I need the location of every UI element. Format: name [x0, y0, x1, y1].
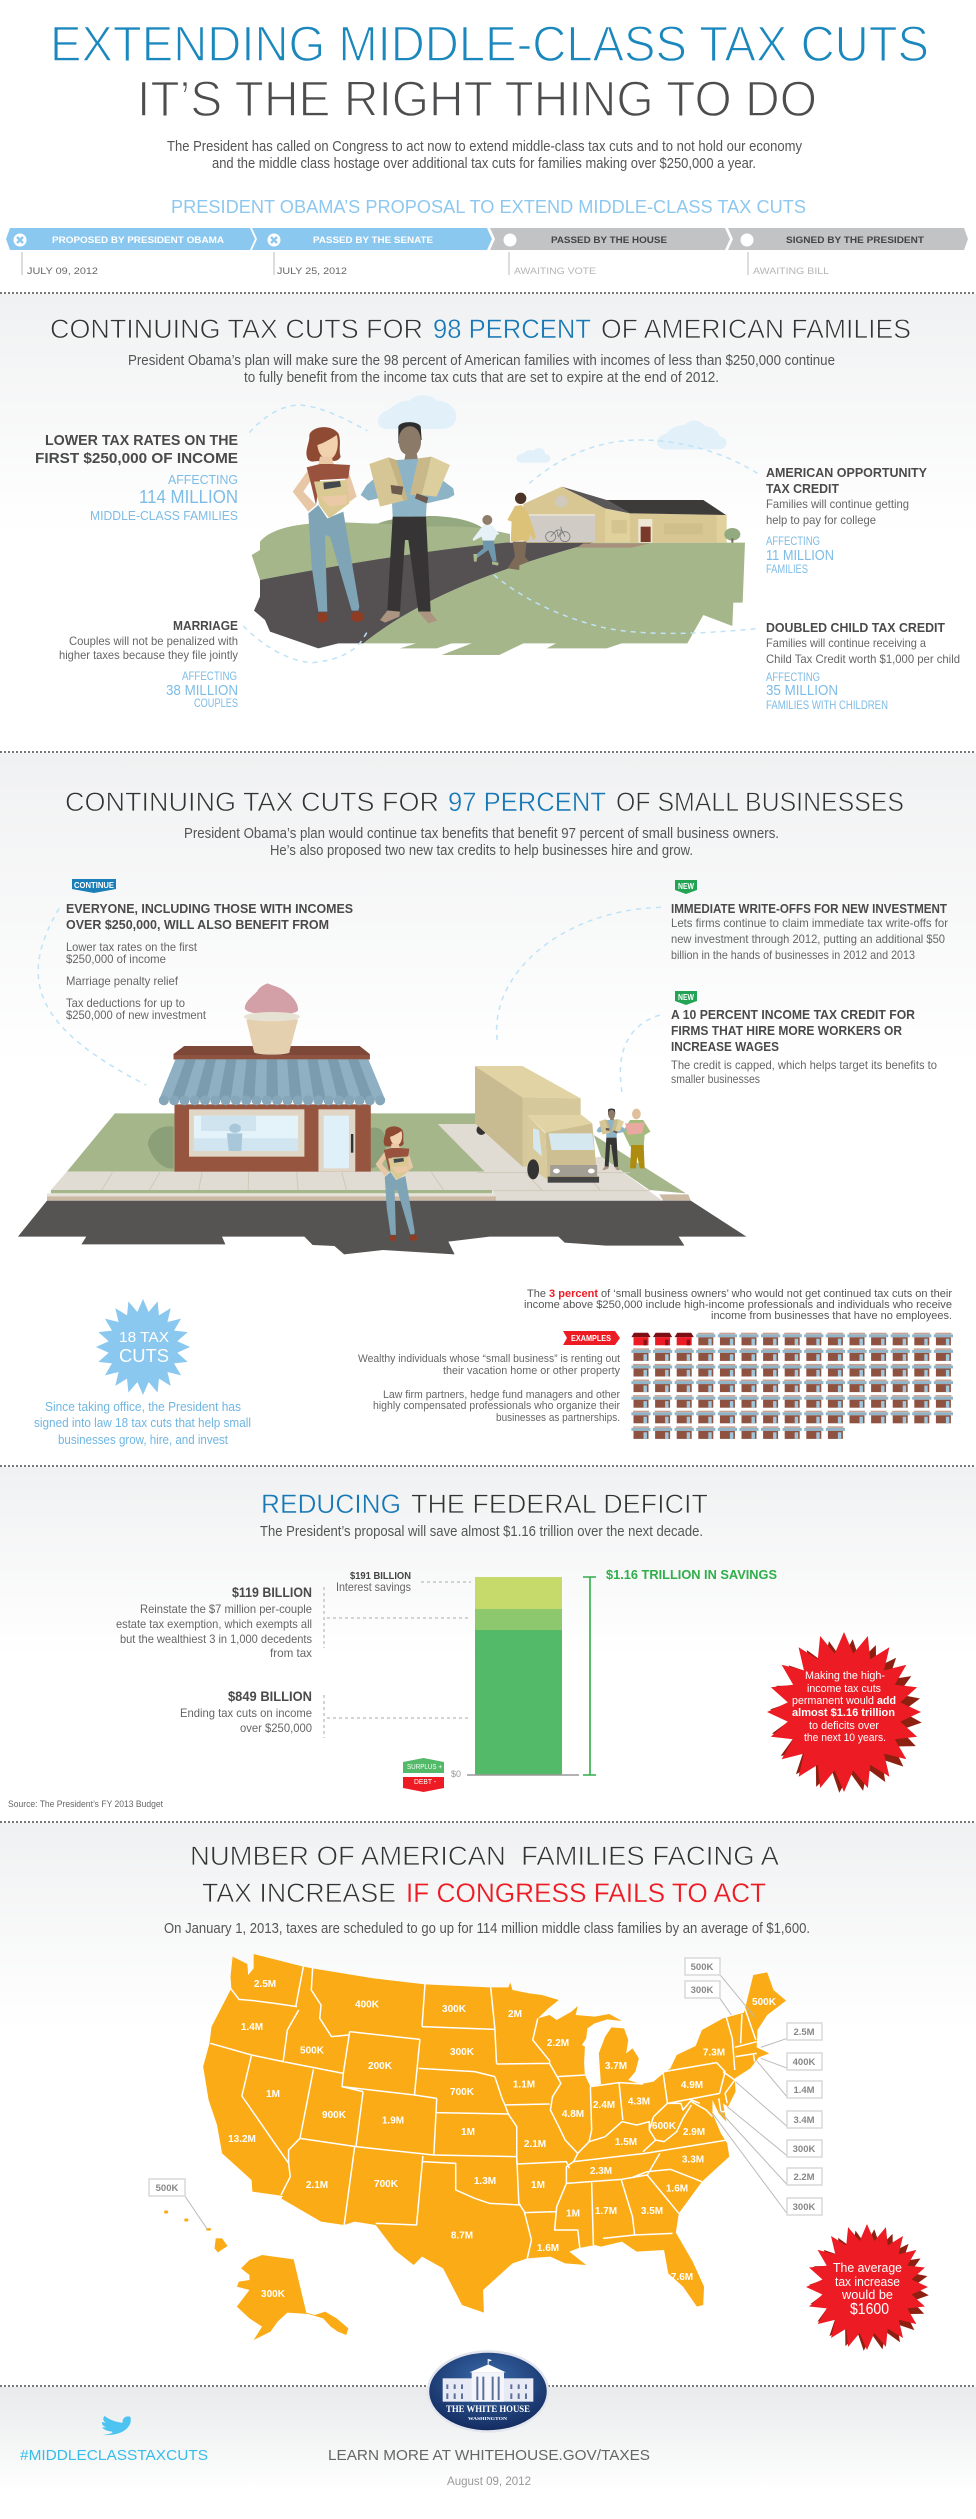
- state value labels: 700K: [450, 2087, 475, 2098]
- callout boxes: 3.4M: [793, 2115, 815, 2126]
- heading: IF CONGRESS FAILS TO ACT: [406, 1878, 766, 1908]
- callout: continue: Lower tax rates on the first: [66, 940, 198, 954]
- callout: lower tax rates: 114 MILLION: [139, 487, 238, 507]
- callout: lower tax rates: [35, 432, 238, 523]
- state value labels: 3.7M: [605, 2061, 627, 2072]
- state value labels: 500K: [300, 2046, 325, 2056]
- step: signed by president: SIGNED BY THE PRESIDENT: [786, 235, 924, 246]
- learn more: LEARN MORE AT WHITEHOUSE.GOV/TAXES: [328, 2448, 650, 2464]
- label: 849 billion: $849 BILLION: [228, 1689, 312, 1704]
- examples text: Law firm partners, hedge fund managers and other: [383, 1389, 620, 1401]
- store building: [159, 1046, 385, 1172]
- callout: marriage: Couples will not be penalized with: [69, 634, 238, 648]
- callout: doubled child tax credit: 35 MILLION: [766, 682, 838, 699]
- section intro: On January 1, 2013, taxes are scheduled to go up for 114 million middle class families by an average of $1,600.: [164, 1920, 810, 1937]
- state value labels: 2.3M: [590, 2166, 612, 2177]
- badge: continue: [72, 879, 116, 893]
- callout: marriage: COUPLES: [194, 696, 238, 710]
- alaska: [237, 2255, 348, 2340]
- state value labels: 2.1M: [524, 2139, 546, 2150]
- hashtag: #MIDDLECLASSTAXCUTS: [20, 2448, 208, 2464]
- surplus and debt key: [403, 1758, 444, 1792]
- callout: american opportunity tax credit: TAX CREDIT: [766, 481, 839, 496]
- callout: continue: $250,000 of income: [66, 952, 166, 966]
- heading: TAX INCREASE: [202, 1878, 396, 1908]
- examples tag: EXAMPLES: [571, 1333, 611, 1343]
- callout boxes: 1.4M: [793, 2085, 815, 2096]
- state value labels: 4.3M: [628, 2096, 650, 2108]
- callout: 10 percent credit: The credit is capped, which helps target its benefits to: [671, 1058, 937, 1072]
- label: 119 billion: Reinstate the $7 million per-couple: [140, 1602, 312, 1616]
- road: [18, 1201, 746, 1254]
- white house seal: [428, 2352, 548, 2432]
- callout: 10 percent credit: A 10 PERCENT INCOME TAX CREDIT FOR: [671, 1007, 916, 1022]
- starburst: 18 tax cuts: [96, 1299, 190, 1395]
- examples tag: [563, 1331, 620, 1345]
- callout: lower tax rates: FIRST $250,000 OF INCOME: [35, 450, 238, 467]
- starburst: average increase: $1600: [850, 2301, 889, 2318]
- callout: american opportunity tax credit: FAMILIES: [766, 562, 808, 576]
- starburst: deficit warning: Making the high-: [805, 1670, 885, 1682]
- heading: 98 PERCENT: [433, 314, 591, 344]
- heading: [261, 1489, 708, 1519]
- callout: immediate write-offs: Lets firms continue to claim immediate tax write-offs for: [671, 916, 948, 930]
- state value labels: 2.2M: [547, 2038, 569, 2049]
- state borders: [210, 1967, 757, 2258]
- title: EXTENDING MIDDLE-CLASS TAX CUTS: [50, 16, 929, 72]
- examples text: highly compensated professionals who organize their: [373, 1400, 620, 1412]
- footer: [20, 2352, 650, 2488]
- section intro: The President’s proposal will save almost $1.16 trillion over the next decade.: [260, 1523, 703, 1540]
- callout: doubled child tax credit: Child Tax Credit worth $1,000 per child: [766, 652, 960, 666]
- stacked bar chart: [324, 1577, 579, 1779]
- clouds: [378, 395, 727, 463]
- state value labels: 600K: [652, 2121, 677, 2132]
- callout: marriage: higher taxes because they file jointly: [59, 648, 238, 662]
- callout: continue: $250,000 of new investment: [66, 1008, 207, 1022]
- callout: 10 percent credit: INCREASE WAGES: [671, 1039, 779, 1054]
- state value labels: 300K: [261, 2289, 286, 2300]
- source: Source: The President’s FY 2013 Budget: [8, 1799, 163, 1810]
- label: 119 billion: $119 BILLION: [232, 1585, 312, 1600]
- curb strips: [47, 1190, 691, 1200]
- starburst: average increase: The average: [833, 2260, 902, 2275]
- state value labels: 2.5M: [254, 1979, 276, 1990]
- callout boxes: 300K: [691, 1985, 713, 1996]
- section intro: President Obama’s plan will make sure the 98 percent of American families with incomes of less than $250,000 continue: [128, 352, 835, 369]
- state value labels: 1M: [266, 2089, 280, 2100]
- step: passed by house: PASSED BY THE HOUSE: [551, 235, 667, 246]
- badge: new: NEW: [678, 882, 694, 891]
- callout: lower tax rates: LOWER TAX RATES ON THE: [45, 432, 238, 449]
- trees: [148, 1126, 386, 1168]
- starburst: deficit warning: income tax cuts: [807, 1683, 881, 1695]
- mainland: [203, 1954, 786, 2313]
- dashed connectors: [38, 907, 661, 1095]
- starburst: 18 tax cuts: CUTS: [119, 1346, 169, 1366]
- starburst: average increase: would be: [841, 2287, 893, 2302]
- state value labels: 4.8M: [562, 2109, 584, 2120]
- intro text: and the middle class hostage over additional tax cuts for families making over $250,000 a year.: [212, 155, 756, 172]
- section intro: President Obama’s plan would continue tax benefits that benefit 97 percent of small business owners.: [184, 825, 779, 842]
- state value labels: [228, 1979, 777, 2300]
- walkway: [577, 543, 650, 548]
- examples text: [358, 1353, 620, 1424]
- callout: immediate write-offs: [671, 880, 948, 962]
- panel: families facing a tax increase: [149, 1841, 934, 2356]
- step: passed by senate: PASSED BY THE SENATE: [313, 235, 433, 246]
- date: August 09, 2012: [447, 2474, 531, 2488]
- panel: 98 percent of american families: [35, 314, 960, 712]
- label: 119 billion: estate tax exemption, which exempts all: [116, 1617, 312, 1631]
- 18 tax cuts text: Since taking office, the President has: [45, 1399, 241, 1414]
- step: signed by president: AWAITING BILL: [753, 266, 829, 277]
- state value labels: 1M: [566, 2208, 580, 2220]
- adult walking: [507, 493, 536, 570]
- starburst: deficit warning: to deficits over: [809, 1720, 879, 1732]
- callout: doubled child tax credit: Families will continue receiving a: [766, 636, 926, 650]
- intro text: The President has called on Congress to act now to extend middle-class tax cuts and to not hold our economy: [167, 138, 802, 155]
- icon: twitter bird: [102, 2416, 131, 2435]
- callout: lower tax rates: AFFECTING: [168, 472, 238, 487]
- step: signed by president: [728, 228, 968, 277]
- state value labels: 13.2M: [228, 2134, 256, 2145]
- examples text: Wealthy individuals whose “small business” is renting out: [358, 1353, 620, 1365]
- state value labels: 1.5M: [615, 2137, 637, 2148]
- savings bracket: $1.16 TRILLION IN SAVINGS: [606, 1567, 777, 1582]
- callout: marriage: AFFECTING: [182, 669, 237, 683]
- state value labels: 1.4M: [241, 2022, 263, 2033]
- callout: 10 percent credit: [671, 991, 937, 1086]
- front lawn: [363, 543, 745, 655]
- title: IT’S THE RIGHT THING TO DO: [137, 71, 817, 127]
- callout: american opportunity tax credit: help to pay for college: [766, 513, 876, 527]
- panel: reducing the federal deficit: [8, 1489, 928, 1810]
- truck: [475, 1066, 599, 1183]
- step: passed by senate: JULY 25, 2012: [277, 266, 347, 277]
- state value labels: 2M: [508, 2009, 522, 2020]
- heading: OF SMALL BUSINESSES: [616, 787, 904, 817]
- stacked bar chart: $0: [451, 1769, 461, 1779]
- state value labels: 1M: [531, 2180, 545, 2191]
- state value labels: 2.1M: [306, 2180, 328, 2191]
- section intro: He’s also proposed two new tax credits to help businesses hire and grow.: [270, 842, 693, 859]
- state value labels: 2.9M: [683, 2127, 705, 2138]
- examples text: their vacation home or other property: [443, 1365, 620, 1377]
- 18 tax cuts text: signed into law 18 tax cuts that help small: [34, 1415, 251, 1430]
- callout: marriage: 38 MILLION: [166, 682, 238, 699]
- callout: doubled child tax credit: AFFECTING: [766, 670, 820, 684]
- callout: american opportunity tax credit: [766, 465, 927, 576]
- label: 849 billion: Ending tax cuts on income: [180, 1706, 312, 1720]
- 3 percent text: income above $250,000 include high-income professionals and individuals who receive: [524, 1299, 952, 1311]
- label: 849 billion: over $250,000: [240, 1721, 312, 1735]
- starburst: average increase: [804, 2224, 934, 2356]
- 18 tax cuts text: [34, 1399, 251, 1447]
- intro text: [167, 138, 802, 172]
- heading: [50, 314, 911, 344]
- state value labels: 500K: [752, 1997, 777, 2008]
- step: passed by house: AWAITING VOTE: [514, 266, 596, 277]
- callout: continue: [66, 879, 353, 1022]
- examples text: businesses as partnerships.: [496, 1412, 620, 1424]
- savings bracket: [583, 1567, 777, 1775]
- leader lines: [184, 1973, 787, 2229]
- child: [473, 515, 499, 566]
- state value labels: 400K: [355, 2000, 380, 2010]
- callout: immediate write-offs: new investment through 2012, putting an additional $50: [671, 932, 945, 946]
- hawaii: [164, 2210, 228, 2252]
- callout: immediate write-offs: billion in the hands of businesses in 2012 and 2013: [671, 948, 915, 962]
- cupcake: [244, 983, 300, 1055]
- section intro: [128, 352, 835, 386]
- callout boxes: 2.2M: [793, 2172, 815, 2183]
- heading: THE FEDERAL DEFICIT: [411, 1489, 708, 1519]
- starburst: deficit warning: almost $1.16 trillion: [792, 1707, 895, 1719]
- state value labels: 1M: [461, 2127, 475, 2138]
- worker with pink box: [623, 1109, 650, 1168]
- state value labels: 900K: [322, 2110, 347, 2121]
- state value labels: 2.4M: [593, 2100, 615, 2111]
- 3 percent text: The 3 percent of ‘small business owners’ who would not get continued tax cuts on their: [527, 1288, 952, 1300]
- white house seal: WASHINGTON: [468, 2416, 508, 2421]
- 18 tax cuts text: businesses grow, hire, and invest: [58, 1432, 228, 1447]
- state value labels: 1.6M: [666, 2184, 688, 2194]
- title: [50, 16, 929, 127]
- callout: doubled child tax credit: FAMILIES WITH CHILDREN: [766, 698, 888, 712]
- callout boxes: 400K: [793, 2057, 815, 2068]
- callout: continue: EVERYONE, INCLUDING THOSE WITH INCOMES: [66, 901, 353, 916]
- callout: american opportunity tax credit: Families will continue getting: [766, 497, 909, 511]
- starburst: deficit warning: [764, 1632, 928, 1799]
- heading: 97 PERCENT: [448, 787, 606, 817]
- callout boxes: 300K: [793, 2202, 815, 2213]
- callout: american opportunity tax credit: AMERICAN OPPORTUNITY: [766, 465, 927, 480]
- step: passed by senate: [252, 228, 492, 277]
- badge: new: [675, 880, 697, 894]
- callout: 10 percent credit: FIRMS THAT HIRE MORE WORKERS OR: [671, 1023, 903, 1038]
- section intro: [184, 825, 779, 859]
- map of the united states: [164, 1954, 787, 2340]
- state value labels: 200K: [368, 2061, 393, 2072]
- callout: continue: Marriage penalty relief: [66, 974, 179, 988]
- heading: [65, 787, 904, 817]
- state value labels: 7.6M: [671, 2272, 693, 2283]
- callout: immediate write-offs: IMMEDIATE WRITE-OFFS FOR NEW INVESTMENT: [671, 901, 947, 916]
- callout: 10 percent credit: smaller businesses: [671, 1072, 760, 1086]
- state value labels: 1.7M: [595, 2206, 617, 2217]
- callout: american opportunity tax credit: AFFECTING: [766, 534, 820, 548]
- timeline heading: PRESIDENT OBAMA’S PROPOSAL TO EXTEND MIDDLE-CLASS TAX CUTS: [171, 197, 806, 217]
- state value labels: 1.3M: [474, 2176, 496, 2187]
- surplus and debt key: SURPLUS +: [407, 1762, 443, 1771]
- callout: continue: OVER $250,000, WILL ALSO BENEFIT FROM: [66, 917, 329, 932]
- callout: lower tax rates: MIDDLE-CLASS FAMILIES: [90, 508, 238, 523]
- callout boxes: 300K: [793, 2144, 815, 2155]
- heading: REDUCING: [261, 1489, 401, 1519]
- heading: OF AMERICAN FAMILIES: [601, 314, 911, 344]
- state value labels: 1.6M: [537, 2243, 559, 2254]
- man: [361, 422, 454, 623]
- state value labels: 700K: [374, 2179, 399, 2190]
- label: 119 billion: from tax: [270, 1646, 312, 1660]
- bicycle: [546, 527, 570, 542]
- state value labels: 3.5M: [641, 2206, 663, 2217]
- starburst: 18 tax cuts: 18 TAX: [119, 1329, 169, 1346]
- label: 191 billion: [336, 1571, 411, 1594]
- worker with bags: [596, 1108, 625, 1170]
- badge: new: [675, 991, 697, 1005]
- label: 119 billion: but the wealthiest 3 in 1,000 decedents: [120, 1632, 312, 1646]
- state value labels: 1.1M: [513, 2080, 535, 2090]
- label: 191 billion: Interest savings: [336, 1580, 411, 1594]
- callout boxes: [149, 1958, 822, 2215]
- section intro: to fully benefit from the income tax cuts that are set to expire at the end of 2012.: [244, 369, 719, 386]
- label: 119 billion: [116, 1585, 312, 1660]
- dashed connectors: [243, 405, 760, 663]
- heading: [190, 1841, 779, 1908]
- woman shopper: [376, 1126, 418, 1241]
- illustration: family and house: [243, 395, 760, 663]
- callout: marriage: [59, 618, 238, 710]
- surplus and debt key: DEBT -: [414, 1777, 436, 1786]
- heading: CONTINUING TAX CUTS FOR: [65, 787, 439, 817]
- panel: 97 percent of small businesses: [18, 787, 953, 1447]
- lawn: [67, 1113, 485, 1172]
- sidewalk and driveway: [51, 1124, 662, 1200]
- label: 849 billion: [180, 1689, 312, 1735]
- starburst: deficit warning: permanent would add: [792, 1695, 896, 1707]
- callout: marriage: MARRIAGE: [173, 618, 238, 633]
- step: proposed by president: PROPOSED BY PRESIDENT OBAMA: [52, 235, 224, 246]
- state value labels: 1.9M: [382, 2116, 404, 2126]
- label: 191 billion: $191 BILLION: [350, 1571, 411, 1582]
- lawn behind road: [252, 522, 510, 580]
- state value labels: 8.7M: [451, 2230, 473, 2242]
- far hill: [377, 516, 483, 528]
- step: passed by house: [490, 228, 730, 277]
- callout: continue: Tax deductions for up to: [66, 996, 185, 1010]
- illustration: storefront street: [18, 983, 746, 1254]
- white house seal: THE WHITE HOUSE: [446, 2404, 530, 2414]
- callout boxes: 500K: [691, 1962, 713, 1973]
- badge: continue: CONTINUE: [74, 881, 115, 890]
- step: proposed by president: JULY 09, 2012: [27, 266, 98, 277]
- house: [523, 487, 740, 543]
- badge: new: NEW: [678, 993, 694, 1002]
- road: [254, 543, 593, 648]
- starburst: deficit warning: the next 10 years.: [804, 1732, 886, 1744]
- starburst: average increase: tax increase: [835, 2274, 900, 2289]
- state value labels: 4.9M: [681, 2080, 703, 2091]
- state value labels: 7.3M: [703, 2048, 725, 2058]
- state value labels: 300K: [442, 2004, 467, 2015]
- 3 percent text: income from businesses that have no employees.: [711, 1310, 952, 1322]
- callout: american opportunity tax credit: 11 MILLION: [766, 547, 834, 564]
- heading: NUMBER OF AMERICAN FAMILIES FACING A: [190, 1841, 779, 1871]
- step: proposed by president: [6, 228, 255, 277]
- callout boxes: 500K: [156, 2183, 178, 2194]
- state value labels: 300K: [450, 2047, 475, 2058]
- woman: [293, 427, 364, 623]
- 3 percent text: [524, 1288, 952, 1322]
- pictogram: 100 small businesses: [631, 1333, 953, 1439]
- timeline: [6, 228, 968, 277]
- state value labels: 3.3M: [682, 2154, 704, 2166]
- callout boxes: 2.5M: [793, 2027, 815, 2038]
- callout: doubled child tax credit: DOUBLED CHILD TAX CREDIT: [766, 620, 945, 635]
- callout: doubled child tax credit: [766, 620, 960, 712]
- heading: CONTINUING TAX CUTS FOR: [50, 314, 423, 344]
